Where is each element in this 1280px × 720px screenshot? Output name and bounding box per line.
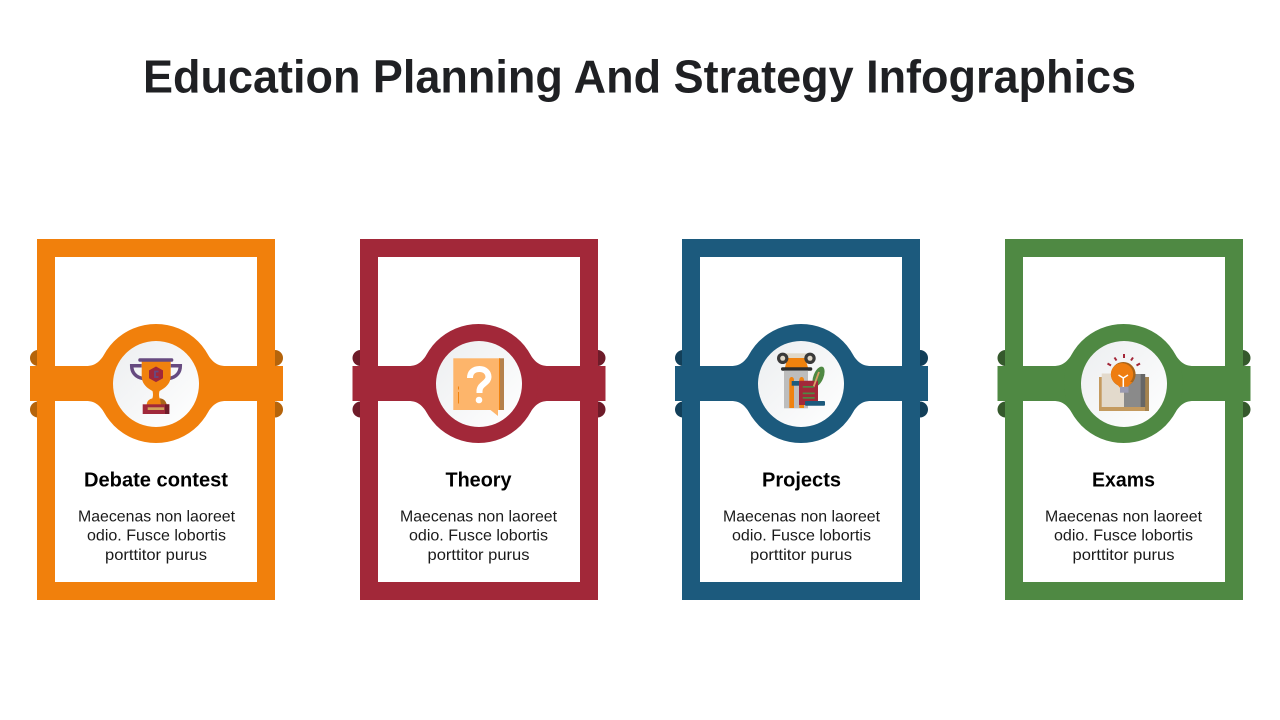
connector band and ring [30,324,283,443]
card frame [360,239,598,600]
body text: Maecenas non laoreet [1045,508,1203,526]
connector tabs [352,350,606,418]
body text [78,508,236,564]
card frame [37,239,275,600]
icon disc [1081,341,1167,427]
panel: Projects [675,239,928,600]
body text: porttitor purus [750,547,852,564]
connector tabs [998,350,1250,418]
heading: Debate contest [84,470,228,492]
card frame [682,239,920,600]
icon: column and quill [777,353,827,408]
body text [1045,508,1203,564]
panel: Exams [998,239,1250,600]
body text: odio. Fusce lobortis [87,528,226,544]
icon disc [436,341,522,427]
icon disc [758,341,844,427]
body text: odio. Fusce lobortis [409,528,548,544]
card frame [1005,239,1243,600]
body text: porttitor purus [105,547,207,564]
body text: Maecenas non laoreet [723,508,881,526]
body text [400,508,558,564]
heading: Exams [1092,470,1155,492]
heading: Theory [446,470,512,492]
body text: odio. Fusce lobortis [1054,528,1193,544]
panel: Debate contest [30,239,283,600]
body text: porttitor purus [428,547,530,564]
connector tabs [30,350,283,418]
connector tabs [675,350,928,418]
body text: odio. Fusce lobortis [732,528,871,544]
connector band and ring [998,324,1250,443]
body text: Maecenas non laoreet [78,508,236,526]
body text [723,508,881,564]
connector band and ring [352,324,606,443]
icon: trophy [132,358,180,414]
heading: Projects [762,470,841,492]
icon: book and light bulb [1099,354,1149,411]
icon: question book [453,358,504,416]
icon disc [113,341,199,427]
connector band and ring [675,324,928,443]
body text: Maecenas non laoreet [400,508,558,526]
panel: Theory [352,239,606,600]
title: Education Planning And Strategy Infographics [143,50,1136,102]
body text: porttitor purus [1072,547,1174,564]
